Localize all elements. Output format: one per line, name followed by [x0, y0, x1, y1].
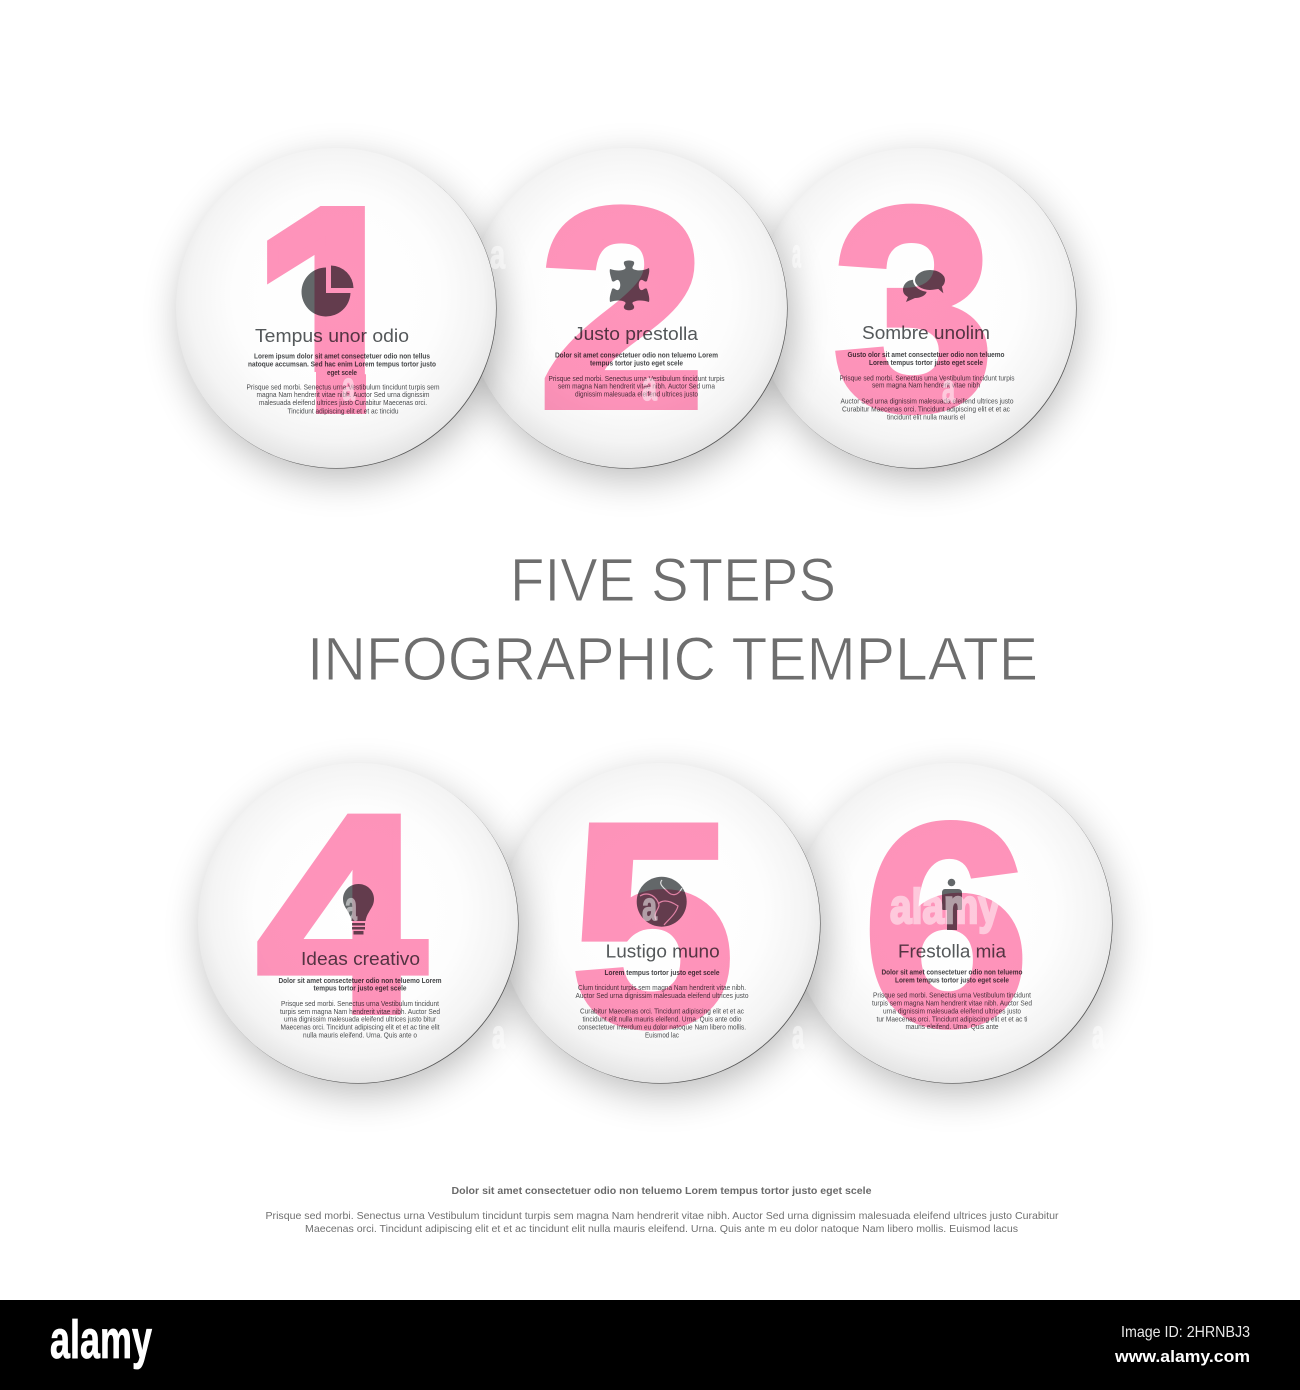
watermark overlays: a: [942, 367, 955, 411]
text block: step 6: Lorem tempus tortor justo eget scele: [895, 976, 1009, 985]
footer text block: Prisque sed morbi. Senectus urna Vestibulum tincidunt turpis sem magna Nam hendrerit vitae nibh. Auctor Sed urna dignissim malesuada eleifend ultrices justo Curabitur: [266, 1210, 1059, 1222]
text block: step 6: urna dignissim malesuada eleifend ultrices justo: [883, 1007, 1021, 1016]
text block: step 2: tempus tortor justo eget scele: [590, 359, 683, 368]
text block: step 3: [840, 350, 1015, 421]
numeral 4: 4: [257, 757, 428, 1071]
site url: www.alamy.com: [1114, 1347, 1250, 1366]
panel: step 3: [756, 148, 1078, 478]
alamy logo: alamy: [50, 1310, 152, 1370]
heading: step 2: Justo prestolla: [574, 324, 699, 344]
footer bar: [0, 1300, 1300, 1390]
text block: step 1: Lorem ipsum dolor sit amet consectetuer odio non tellus: [254, 352, 430, 360]
watermark overlays: a: [792, 232, 801, 276]
text block: step 2: dignissim malesuada eleifend ultrices justo: [575, 390, 698, 399]
watermark overlays: a: [492, 1013, 505, 1057]
text block: step 1: eget scele: [327, 368, 357, 377]
text block: step 4: turpis sem magna Nam hendrerit vitae nibh. Auctor Sed: [280, 1007, 440, 1016]
footer text block: [266, 1186, 1059, 1235]
text block: step 3: Prisque sed morbi. Senectus urna Vestibulum tincidunt turpis: [840, 373, 1015, 382]
text block: step 3: sem magna Nam hendrerit vitae nibh: [872, 381, 980, 390]
text block: step 5: consectetuer interdum eu dolor natoque Nam libero mollis.: [578, 1022, 746, 1031]
title: FIVE STEPS: [510, 546, 836, 614]
text block: step 3: Gusto olor sit amet consectetuer odio non teluemo: [848, 350, 1005, 359]
watermark overlays: a: [342, 365, 355, 409]
text block: step 2: [548, 351, 725, 399]
footer text block: Maecenas orci. Tincidunt adipiscing elit et et ac tincidunt elit nulla mauris eleifend. Urna. Quis ante m eu dolor natoque Nam libero mollis. Euismod lacus: [305, 1223, 1018, 1235]
watermark overlays: a: [490, 233, 506, 277]
watermark overlays: [342, 232, 1104, 1057]
text block: step 2: Dolor sit amet consectetuer odio non teluemo Lorem: [555, 351, 718, 360]
footer text block: Dolor sit amet consectetuer odio non teluemo Lorem tempus tortor justo eget scele: [452, 1186, 872, 1197]
watermark overlays: a: [1092, 1013, 1104, 1057]
text block: step 1: magna Nam hendrerit vitae nibh. Auctor Sed urna dignissim: [256, 390, 430, 399]
heading: step 6: Frestolla mia: [898, 941, 1007, 961]
text block: step 3: Auctor Sed urna dignissim malesuada eleifend ultrices justo: [840, 397, 1014, 406]
watermark overlays: a: [792, 1013, 804, 1057]
panel: step 6: [792, 763, 1114, 1093]
text block: step 1: malesuada eleifend ultrices justo Curabitur Maecenas orci.: [259, 398, 427, 407]
text block: step 6: [872, 967, 1032, 1031]
text block: step 5: Clum tincidunt turpis sem magna Nam hendrerit vitae nibh.: [578, 983, 746, 992]
icon: globe: [637, 877, 687, 927]
text block: step 5: Euismod lac: [645, 1030, 679, 1039]
text block: step 6: Dolor sit amet consectetuer odio non teluemo: [882, 967, 1023, 976]
icon: speech bubbles: [903, 269, 946, 302]
text block: step 1: Prisque sed morbi. Senectus urna Vestibulum tincidunt turpis sem: [246, 382, 440, 392]
text block: step 5: Auctor Sed urna dignissim malesuada eleifend ultrices justo: [576, 991, 748, 1000]
text block: step 1: natoque accumsan. Sed hac enim Lorem tempus tortor justo: [248, 360, 436, 368]
text block: step 6: mauris eleifend. Urna. Quis ante: [906, 1022, 998, 1031]
numeral 6: 6: [863, 766, 1029, 1084]
heading: step 3: Sombre unolim: [862, 323, 990, 343]
text block: step 3: Lorem tempus tortor justo eget scele: [869, 358, 983, 367]
text block: step 6: Prisque sed morbi. Senectus urna Vestibulum tincidunt: [873, 991, 1031, 1000]
panel: step 2: [467, 148, 789, 478]
text block: step 1: Tincidunt adipiscing elit et et ac tincidu: [288, 406, 398, 416]
panel: step 4: [198, 757, 520, 1093]
text block: step 3: Curabitur Maecenas orci. Tincidunt adipiscing elit et et ac: [842, 405, 1010, 414]
numeral 1: 1: [253, 149, 413, 470]
numeral 5: 5: [571, 764, 734, 1085]
numeral 2: 2: [538, 150, 706, 466]
image id: Image ID: 2HRNBJ3: [1121, 1324, 1250, 1341]
icon: person: [942, 879, 962, 930]
watermark overlays: a: [345, 885, 357, 929]
icon: pie chart: [302, 266, 354, 316]
text block: step 3: tincidunt elit nulla mauris el: [887, 412, 965, 421]
text block: step 4: Maecenas orci. Tincidunt adipiscing elit et et ac tine elit: [280, 1023, 440, 1032]
text block: step 4: Prisque sed morbi. Senectus urna Vestibulum tincidunt: [281, 999, 439, 1008]
text block: step 4: tempus tortor justo eget scele: [314, 984, 406, 993]
text block: step 5: tincidunt elit nulla mauris eleifend. Urna. Quis ante odio: [582, 1015, 742, 1024]
heading: step 4: Ideas creativo: [301, 949, 420, 969]
watermark overlays: a: [642, 885, 658, 929]
heading: step 1: Tempus unor odio: [255, 326, 409, 346]
text block: step 5: Curabitur Maecenas orci. Tincidunt adipiscing elit et et ac: [580, 1007, 744, 1016]
text block: step 4: nulla mauris eleifend. Urna. Quis ante o: [303, 1031, 417, 1040]
watermark overlays: alamy: [890, 881, 1000, 934]
text block: step 1: [246, 352, 440, 416]
panel: step 1: [176, 148, 498, 478]
text block: step 6: tur Maecenas orci. Tincidunt adipiscing elit et et ac ti: [876, 1015, 1028, 1024]
heading: step 5: Lustigo muno: [606, 941, 720, 961]
icon: light bulb: [343, 884, 374, 934]
icon: puzzle piece: [610, 260, 649, 310]
numeral 3: 3: [833, 148, 994, 469]
watermark overlays: a: [642, 365, 658, 409]
text block: step 4: [278, 976, 442, 1040]
text block: step 5: [576, 968, 748, 1039]
text block: step 4: Dolor sit amet consectetuer odio non teluemo Lorem: [278, 976, 442, 985]
title: [307, 546, 1038, 693]
panel: step 5: [500, 763, 822, 1093]
text block: step 6: turpis sem magna Nam hendrerit vitae nibh. Auctor Sed: [872, 999, 1032, 1008]
text block: step 5: Lorem tempus tortor justo eget scele: [604, 968, 720, 977]
title: INFOGRAPHIC TEMPLATE: [307, 625, 1038, 693]
text block: step 4: urna dignissim malesuada eleifend ultrices justo bitur: [284, 1015, 436, 1024]
text block: step 2: sem magna Nam hendrerit vitae nibh. Auctor Sed urna: [558, 382, 716, 391]
text block: step 2: Prisque sed morbi. Senectus urna Vestibulum tincidunt turpis: [548, 374, 725, 383]
